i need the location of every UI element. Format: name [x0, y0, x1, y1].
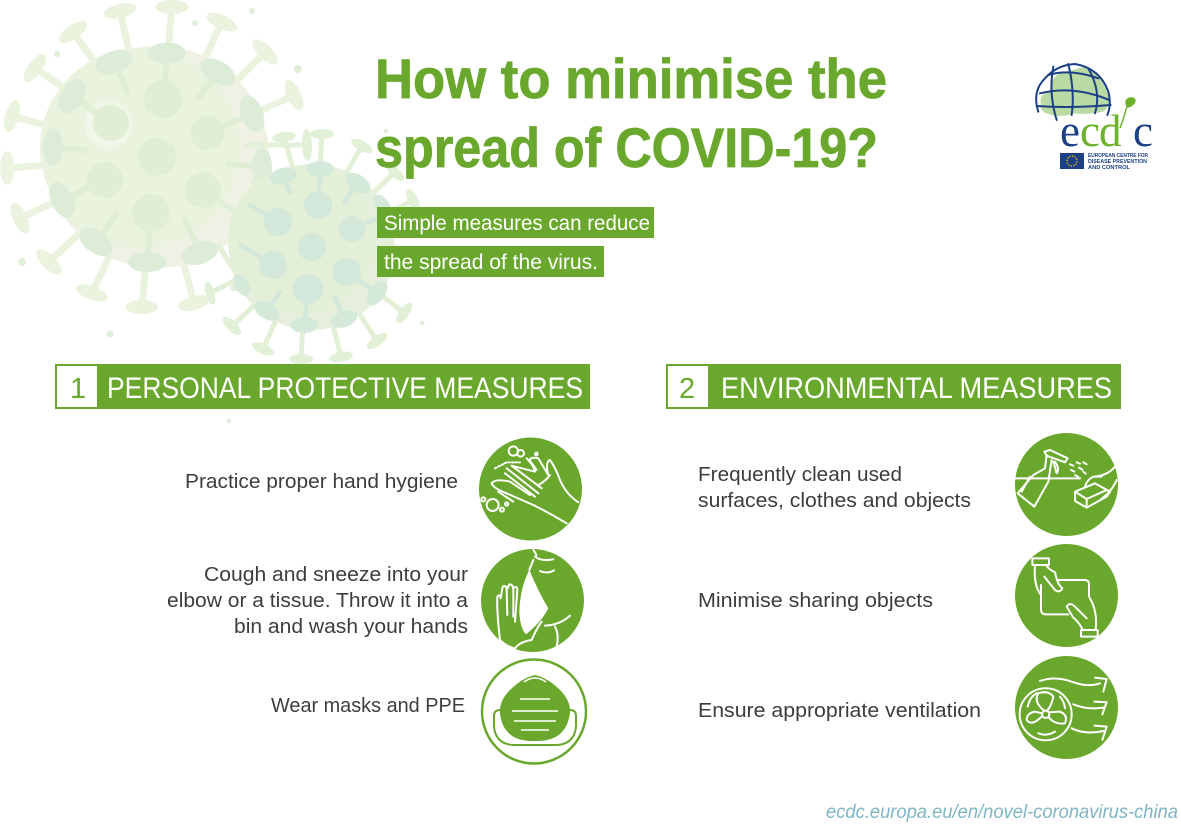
section header 2: 2 [679, 373, 695, 405]
logo: ECDC: c [1133, 106, 1153, 156]
section header 1: 1 [70, 373, 86, 405]
measure text: cough and sneeze: bin and wash your hands [234, 616, 468, 638]
title: spread of COVID-19? [375, 116, 878, 179]
virus illustration: large [0, 0, 424, 338]
icon: ventilation fan [1015, 656, 1118, 759]
title [375, 47, 887, 179]
measure text: cough and sneeze [167, 564, 469, 638]
section header 1: PERSONAL PROTECTIVE MEASURES [107, 372, 583, 405]
section header 2 [666, 364, 1121, 409]
measure text: ventilation: Ensure appropriate ventilation [698, 700, 981, 722]
section header 1 [55, 364, 590, 409]
icon: sneezing into tissue [481, 549, 584, 652]
subtitle [377, 207, 654, 277]
source link: ecdc.europa.eu/en/novel-coronavirus-china [826, 802, 1178, 823]
icon: sharing object between hands [1015, 544, 1118, 647]
icon: spray and cloth [1015, 433, 1118, 536]
logo: ECDC: AND CONTROL [1088, 165, 1131, 171]
logo: ECDC: DISEASE PREVENTION [1088, 159, 1147, 165]
logo: ECDC: c [1080, 106, 1100, 156]
logo: ECDC: e [1060, 106, 1080, 156]
measure text: sharing: Minimise sharing objects [698, 590, 933, 612]
measure text: hand hygiene: Practice proper hand hygiene [185, 471, 458, 493]
measure text: cough and sneeze: elbow or a tissue. Throw it into a [167, 590, 469, 612]
logo: ECDC: EUROPEAN CENTRE FOR [1088, 153, 1148, 159]
logo globe [1036, 64, 1111, 120]
subtitle: Simple measures can reduce [384, 212, 650, 235]
measure text: clean surfaces: Frequently clean used [698, 464, 902, 486]
logo: ECDC [1036, 64, 1153, 171]
icon: hand washing [479, 438, 582, 540]
title: How to minimise the [375, 47, 887, 110]
measure text: masks: Wear masks and PPE [271, 695, 465, 717]
icon: face mask [482, 660, 586, 764]
measure text: cough and sneeze: Cough and sneeze into your [204, 564, 468, 586]
section header 2: ENVIRONMENTAL MEASURES [721, 372, 1112, 405]
virus illustration: small [203, 129, 423, 423]
logo: ECDC: d [1099, 106, 1122, 156]
measure text: clean surfaces: surfaces, clothes and objects [698, 490, 971, 512]
subtitle: the spread of the virus. [384, 251, 598, 274]
measure text: clean surfaces [698, 464, 971, 512]
